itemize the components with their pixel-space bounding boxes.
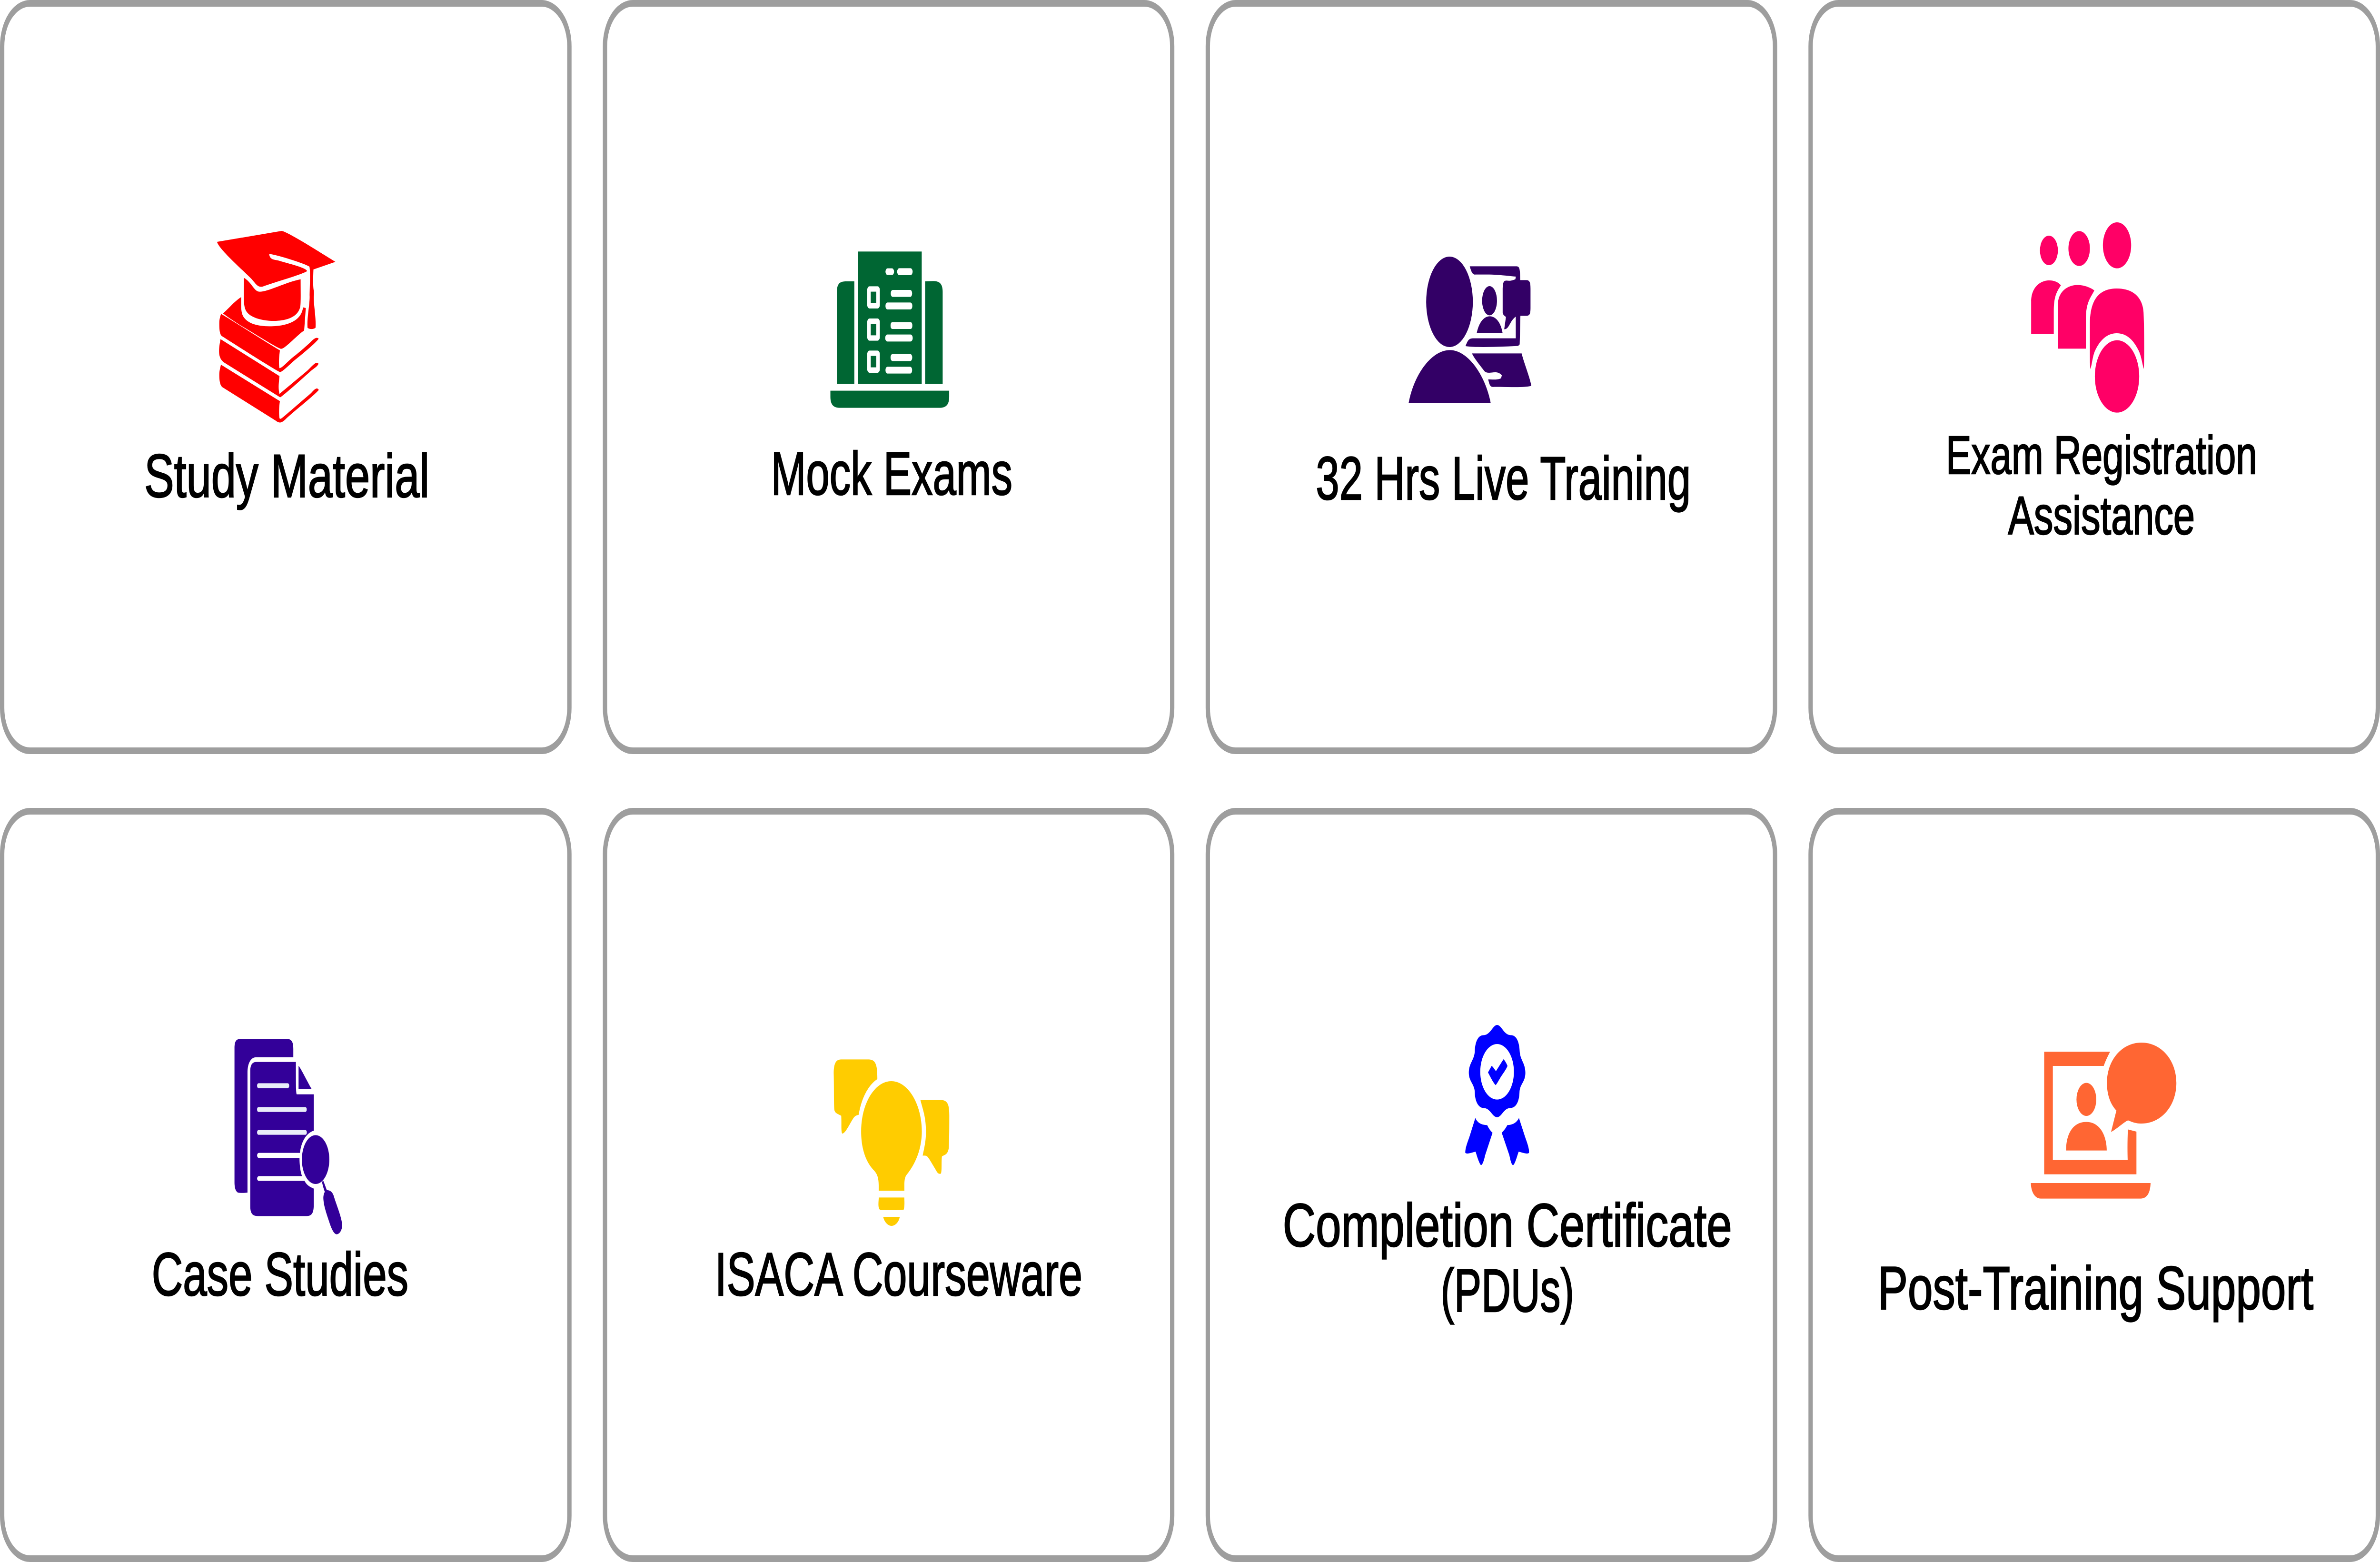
icon: documents with magnifier <box>235 1039 342 1234</box>
label: Completion Certificate (PDUs) <box>1283 1191 1732 1324</box>
label: 32 Hrs Live Training: 32 Hrs Live Training <box>1316 444 1691 512</box>
label: Exam Registration Assistance: Assistance <box>2008 486 2195 546</box>
label: Study Material: Study Material <box>144 442 429 510</box>
icon: group of people <box>2031 222 2144 413</box>
panel: Mock Exams <box>605 3 1172 751</box>
panel: Exam Registration Assistance <box>1811 3 2378 751</box>
label: Exam Registration Assistance <box>1946 426 2257 546</box>
icon: laptop with speech bubble <box>2031 1043 2176 1199</box>
panel: Completion Certificate (PDUs) <box>1208 811 1775 1559</box>
icon: exam sheet on laptop <box>831 251 949 408</box>
label: Exam Registration Assistance: Exam Registration <box>1946 426 2257 486</box>
panel: Study Material <box>2 3 569 751</box>
icon: person attending video class <box>1408 257 1531 403</box>
icon: graduation cap on books <box>217 231 336 422</box>
panel: ISACA Courseware <box>605 811 1172 1559</box>
panel: Case Studies <box>2 811 569 1559</box>
label: Case Studies: Case Studies <box>152 1240 408 1308</box>
panel: 32 Hrs Live Training <box>1208 3 1775 751</box>
label: Completion Certificate (PDUs): Completion Certificate <box>1283 1191 1732 1259</box>
label: Completion Certificate (PDUs): (PDUs) <box>1441 1256 1574 1324</box>
icon: light bulb with speech bubbles <box>833 1059 949 1226</box>
panel: Post-Training Support <box>1811 811 2378 1559</box>
label: ISACA Courseware: ISACA Courseware <box>715 1240 1082 1308</box>
label: Post-Training Support: Post-Training Support <box>1878 1254 2313 1322</box>
label: Mock Exams: Mock Exams <box>771 439 1012 507</box>
icon: award rosette with check <box>1465 1025 1529 1165</box>
